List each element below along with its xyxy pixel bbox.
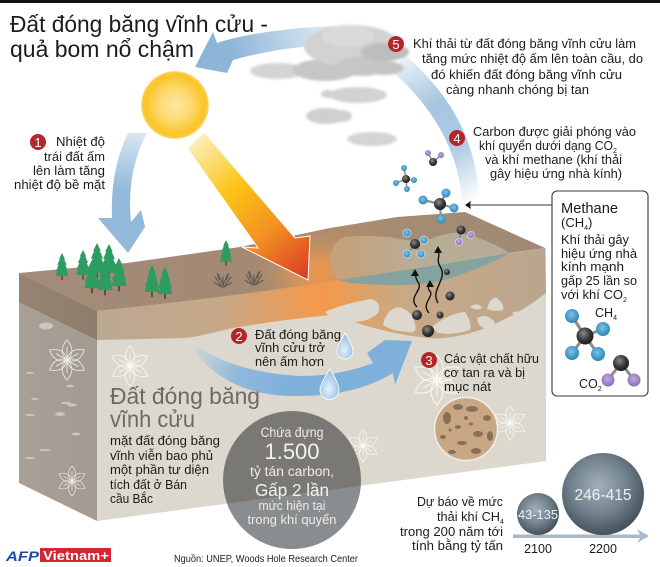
orange heat glow <box>282 252 354 292</box>
arrow: sun heating the ground <box>187 132 310 280</box>
methane info box: hiệu ứng nhà <box>561 246 638 261</box>
methane info box: Khí thải gây <box>561 232 629 247</box>
forecast caption: trong 200 năm tới <box>400 524 503 539</box>
arrow: emissions back to the sun <box>195 26 335 73</box>
pointer arrow to methane <box>465 201 552 209</box>
carbon stock circle: mức hiện tại <box>258 498 326 513</box>
step 5 label: Khí thải từ đất đóng băng vĩnh cửu làm <box>413 37 636 51</box>
step 5 label: càng nhanh chóng bị tan <box>446 83 589 97</box>
thaw lake <box>338 253 510 285</box>
carbon stock circle: Gấp 2 lần <box>255 480 329 500</box>
step 4 label <box>449 125 636 181</box>
CH4 molecule small <box>393 165 417 192</box>
step 5 label: 5 <box>392 37 400 52</box>
year labels: 2100 <box>524 542 552 556</box>
sun <box>141 71 209 139</box>
title: Đất đóng băng vĩnh cửu - <box>10 11 268 37</box>
carbon stock circle: trong khí quyển <box>248 512 336 527</box>
arrow: warming surface <box>98 133 147 253</box>
permafrost description: vĩnh viễn bao phủ <box>110 448 213 463</box>
arrow: warming permafrost <box>185 337 412 396</box>
step 2 label: nên ấm hơn <box>255 355 324 369</box>
rising gas squiggles <box>411 246 442 313</box>
carbon stock circle: 1.500 <box>264 439 320 464</box>
step 5 label: tăng mức nhiệt độ ấm lên toàn cầu, do <box>422 52 643 66</box>
step 1 label: nhiệt độ bề mặt <box>14 178 106 192</box>
permafrost block <box>19 212 546 521</box>
front face <box>97 248 546 521</box>
permafrost description <box>110 434 220 506</box>
step 5 label: đó khiến đất đóng băng vĩnh cửu <box>431 68 622 82</box>
thawing bank <box>330 233 510 280</box>
step 3 label: cơ tan ra và bị <box>444 366 525 380</box>
methane info box: 4 <box>584 225 588 232</box>
step 1 label <box>14 134 106 192</box>
step 2 label <box>231 328 341 369</box>
CH4 molecule lower <box>403 229 428 258</box>
CH4 label: CH <box>595 306 613 320</box>
step 4 label: gây hiệu ứng nhà kính) <box>490 167 622 181</box>
permafrost description: một phần tư diện <box>110 463 209 477</box>
CH4 label: 4 <box>613 315 617 322</box>
CO2 molecule top <box>425 150 444 166</box>
water drops <box>320 333 353 400</box>
logo: AFP Vietnam+ <box>5 548 111 564</box>
methane info box: ) <box>588 215 592 230</box>
step 2 label: Đất đóng băng <box>255 328 341 342</box>
step 4 label: và khí methane (khí thải <box>485 153 622 167</box>
step 3 label: mục nát <box>444 380 492 394</box>
source credit: Nguồn: UNEP, Woods Hole Research Center <box>174 553 359 565</box>
step 3 label: 3 <box>425 353 433 368</box>
step 1 label: trái đất ấm <box>44 150 105 164</box>
step 4 label: Carbon được giải phóng vào <box>473 125 636 139</box>
methane info box: Methane <box>561 201 618 217</box>
methane info box: với khí CO <box>561 287 623 302</box>
top black bar <box>0 0 660 3</box>
carbon stock circle: Chứa đựng <box>260 425 324 440</box>
step 4 label: khí quyển dưới dạng CO <box>479 139 613 153</box>
title: quả bom nổ chậm <box>10 36 194 62</box>
left face brown band <box>19 273 97 340</box>
soil texture circle <box>434 398 498 460</box>
arc arrow: step 4 to step 5 <box>393 55 479 203</box>
methane info box: gấp 25 lần so <box>561 273 637 288</box>
CO2 label: CO <box>579 377 598 391</box>
permafrost description: mặt đất đóng băng <box>110 434 220 448</box>
year labels: 2200 <box>589 542 617 556</box>
CO2 molecule lower <box>456 226 474 246</box>
step 2 label: vĩnh cửu trở <box>255 341 325 355</box>
title <box>10 11 268 62</box>
bubble 2100 <box>517 493 559 535</box>
year labels <box>524 542 617 556</box>
methane info box: (CH <box>561 215 584 230</box>
forecast caption: tính bằng tỷ tấn <box>412 538 503 553</box>
permafrost description: cầu Bắc <box>110 491 153 506</box>
front soil band <box>97 248 546 340</box>
organic particles <box>412 269 454 337</box>
floating molecules <box>393 150 474 258</box>
methane info box: 2 <box>623 297 627 304</box>
step 5 label <box>388 36 643 97</box>
permafrost description: tích đất ở Bán <box>110 478 187 492</box>
heading: permafrost: Đất đóng băng <box>110 383 260 409</box>
forecast caption: Dự báo về mức <box>417 494 503 509</box>
buried pebbles <box>325 298 523 334</box>
timeline axis arrow <box>513 529 649 543</box>
step 3 label <box>421 352 539 394</box>
step 4 label: 2 <box>613 148 617 155</box>
heading: permafrost: vĩnh cửu <box>110 406 195 432</box>
logo: AFP Vietnam+: Vietnam+ <box>43 548 109 563</box>
left face <box>19 273 97 521</box>
forecast caption: 4 <box>500 519 504 526</box>
step 1 label: lên làm tăng <box>33 164 105 178</box>
forecast caption <box>400 494 504 553</box>
bubble 2100: 43-135 <box>518 508 558 522</box>
snowflake group <box>47 340 527 496</box>
carbon stock circle <box>223 411 361 549</box>
methane info box: kính mạnh <box>561 259 624 274</box>
bubble 2200: 246-415 <box>574 487 632 504</box>
CO2 label: 2 <box>598 386 602 393</box>
top surface <box>19 212 545 311</box>
step 2 label: 2 <box>235 329 243 344</box>
cloud cluster <box>250 25 409 146</box>
carbon stock circle: tỷ tán carbon, <box>250 464 334 479</box>
methane info box <box>552 191 648 396</box>
heading: permafrost <box>110 383 260 432</box>
step 1 label: 1 <box>34 135 42 150</box>
step 3 label: Các vật chất hữu <box>444 352 539 366</box>
CH4 molecule large <box>418 188 458 224</box>
step 4 label: 4 <box>453 131 461 146</box>
trees and shrubs <box>56 240 263 299</box>
CH4 diagram <box>565 309 610 361</box>
logo: AFP Vietnam+: AFP <box>5 548 40 564</box>
left face specks <box>25 322 80 459</box>
forecast caption: thải khí CH <box>437 509 500 524</box>
step 1 label: Nhiệt độ <box>56 135 105 149</box>
bubble 2200 <box>562 453 644 535</box>
CO2 diagram <box>602 355 640 386</box>
